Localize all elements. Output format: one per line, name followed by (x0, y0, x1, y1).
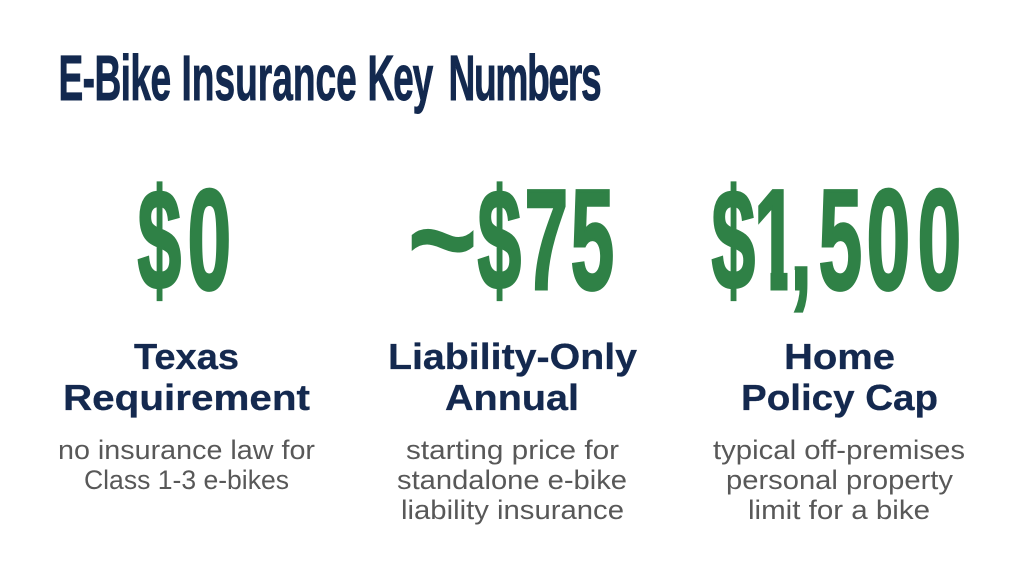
heading: Texas Requirement (63, 336, 310, 418)
title: Numbers (449, 44, 600, 115)
description: home policy cap: typical off-premises (713, 435, 965, 465)
title: Insurance (181, 44, 357, 115)
description: Texas requirement (58, 435, 315, 495)
description: liability-only annual (397, 435, 627, 525)
big number: ~$75: $75 (478, 161, 614, 320)
panel: Texas requirement (58, 161, 315, 495)
big number: $1,500: $1,500 (711, 161, 961, 320)
big number: $0: $0 (137, 161, 231, 320)
heading: Liability-Only Annual (388, 336, 637, 418)
heading: Liability-Only Annual: Liability-Only (388, 336, 637, 377)
panel: home policy cap (711, 161, 965, 525)
description: Texas requirement: Class 1-3 e-bikes (84, 465, 289, 495)
heading: Liability-Only Annual: Annual (445, 377, 579, 418)
description: liability-only annual: liability insurance (401, 495, 624, 525)
description: home policy cap: personal property (726, 465, 954, 495)
description: liability-only annual: starting price for (406, 435, 619, 465)
description: liability-only annual: standalone e-bike (397, 465, 627, 495)
description: Texas requirement: no insurance law for (58, 435, 315, 465)
heading: Home Policy Cap: Home (784, 336, 895, 377)
heading: Texas Requirement: Texas (134, 336, 239, 377)
title: Key (367, 44, 433, 115)
heading: Home Policy Cap: Policy Cap (741, 377, 938, 418)
big number: ~$75: ~ (407, 158, 478, 318)
description: home policy cap: limit for a bike (748, 495, 930, 525)
big number: ~$75 (407, 158, 614, 320)
description: home policy cap (713, 435, 965, 525)
title: E-Bike (59, 44, 171, 115)
heading: Home Policy Cap (741, 336, 938, 418)
panel: liability-only annual (388, 158, 637, 525)
heading: Texas Requirement: Requirement (63, 377, 310, 418)
